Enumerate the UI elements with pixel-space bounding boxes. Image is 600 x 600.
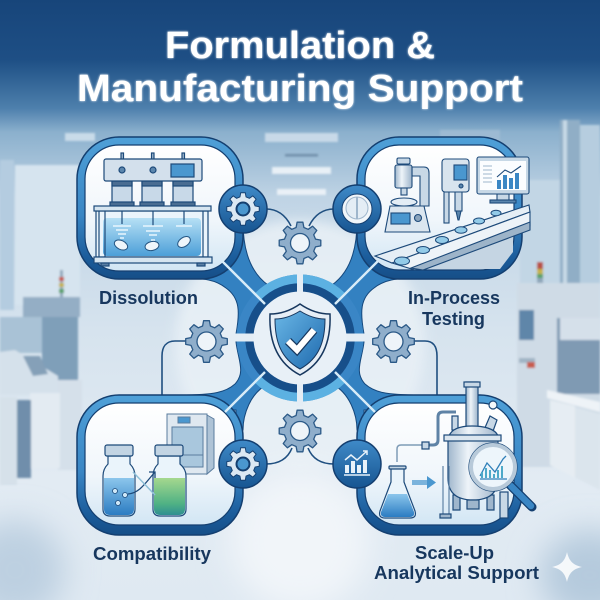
panel: compatibility: [77, 395, 243, 535]
label: scale-up analytical support: [374, 542, 539, 583]
illustration: probe device: [442, 159, 469, 223]
title: Formulation &: [165, 25, 435, 67]
gear: top centre: [279, 222, 321, 264]
panel: in-process testing: [357, 137, 530, 279]
gear: bottom centre: [279, 410, 321, 452]
medallion: gear bottom-left: [219, 440, 267, 488]
arrow: vial to vial: [128, 472, 155, 495]
illustration: vortices and tablets: [113, 226, 192, 252]
medallion: gear top-left: [219, 185, 267, 233]
illustration: monitor with chart: [477, 157, 529, 203]
label: compatibility: Compatibility: [93, 543, 212, 564]
title: [77, 25, 523, 110]
connector: bottom-right band: [304, 342, 420, 430]
panel: scale-up analytical support: [357, 382, 532, 535]
central hub connectors: [180, 222, 420, 430]
illustration: stability oven: [167, 414, 214, 474]
link lines between gears and medallions: [162, 209, 437, 464]
illustration: tablets on conveyor: [394, 210, 501, 265]
label: in-process testing: [408, 287, 500, 329]
central ring: [230, 270, 370, 406]
connector: top-left band: [180, 222, 296, 334]
diagonal highlights: [222, 261, 378, 412]
central disc with shield: [254, 292, 346, 384]
label: scale-up analytical support: Analytical Support: [374, 562, 539, 583]
illustration: flask: [380, 466, 415, 518]
arrow: flask to reactor: [412, 476, 436, 489]
label: in-process testing: Testing: [422, 308, 485, 329]
connector: bottom-left band: [180, 342, 296, 430]
icon: magnifying glass with chart: [469, 443, 532, 507]
sparkle: [552, 552, 582, 582]
gear: left: [186, 321, 227, 362]
medallion: chart bottom-right: [333, 440, 381, 488]
label: in-process testing: In-Process: [408, 287, 500, 308]
connector: top-right band: [304, 222, 420, 334]
illustration: reactor vessel: [397, 382, 508, 518]
illustration: green vial: [153, 445, 186, 516]
label: scale-up analytical support: Scale-Up: [415, 542, 494, 563]
label: dissolution: Dissolution: [99, 287, 198, 308]
illustration: conveyor belt: [375, 205, 530, 270]
icon: shield: [270, 304, 330, 375]
illustration: blue vial: [103, 445, 135, 516]
panel: dissolution: [77, 137, 243, 279]
title: Manufacturing Support: [77, 68, 523, 110]
gear: right: [373, 321, 414, 362]
illustration: microscope tester: [385, 158, 430, 232]
medallion: tablet top-right: [333, 185, 381, 233]
illustration: dissolution apparatus: [94, 153, 212, 266]
